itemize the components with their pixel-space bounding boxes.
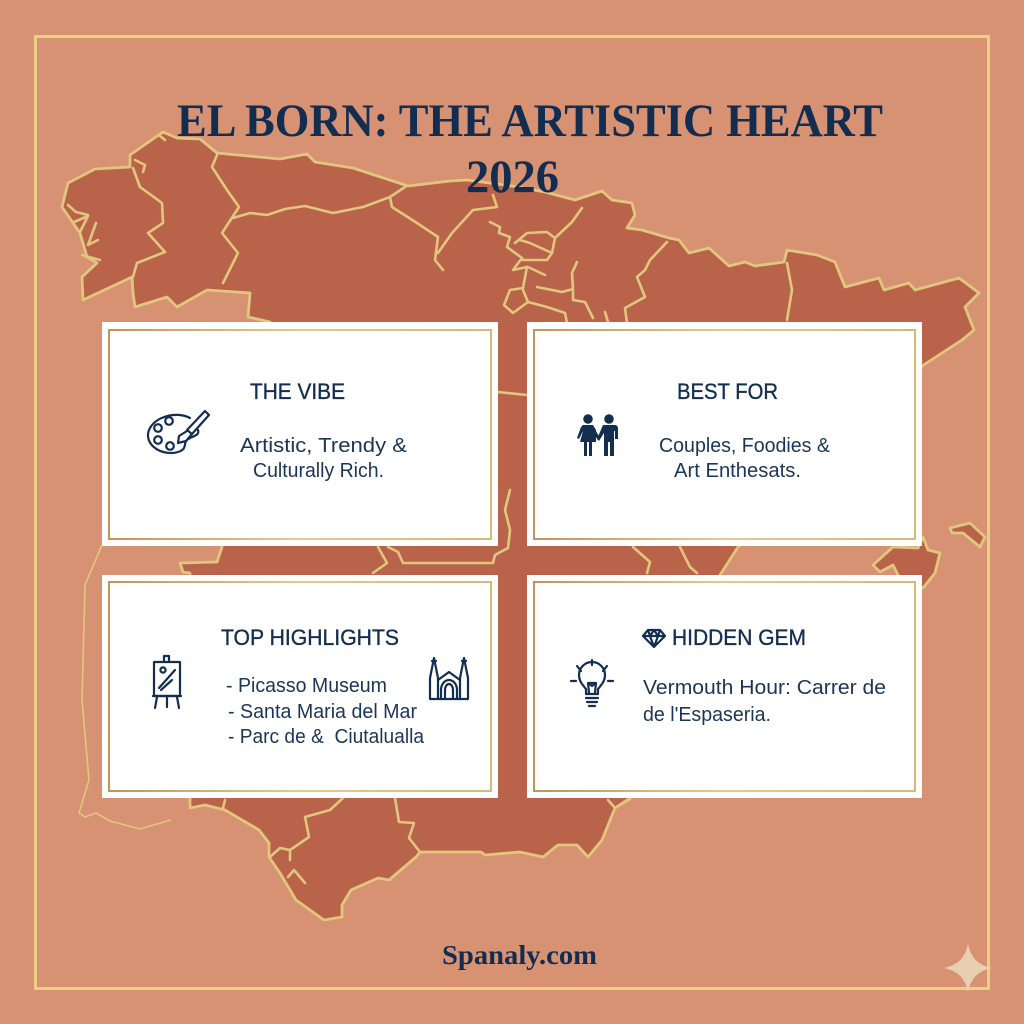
heading: hidden gem: HIDDEN GEM (672, 625, 806, 650)
heading: top highlights: TOP HIGHLIGHTS (221, 625, 399, 650)
map: mainland fill (62, 132, 979, 920)
panel: best for: Art Enthesats. (674, 460, 801, 482)
map of Spain (62, 132, 985, 920)
title: 2026 (466, 151, 559, 203)
heading: the vibe: THE VIBE (250, 379, 345, 404)
map: island (950, 523, 985, 547)
panel: hidden gem (527, 575, 922, 798)
text: best for: Couples, Foodies & (659, 435, 831, 457)
panel: best for (527, 322, 922, 546)
map: region borders (68, 136, 792, 883)
icon: paint palette (148, 411, 209, 453)
heading: best for: BEST FOR (677, 379, 778, 404)
icon: couple (577, 414, 618, 456)
panel: the vibe (102, 322, 498, 546)
map: Portugal faint outline (79, 293, 270, 829)
icon: light bulb (571, 660, 613, 706)
title (177, 95, 883, 203)
icon: easel (153, 656, 181, 708)
title: EL BORN: THE ARTISTIC HEART (177, 95, 883, 147)
list: highlights: - Parc de & Ciutalualla (228, 726, 425, 748)
text: hidden gem: Vermouth Hour: Carrer de (643, 677, 886, 699)
list: highlights: - Picasso Museum (226, 675, 387, 697)
map: eastern coast fill (873, 537, 940, 588)
icon: gem (643, 630, 665, 647)
icon: cathedral arch (430, 658, 468, 699)
panel: the vibe: Culturally Rich. (253, 460, 384, 482)
list: highlights: - Santa Maria del Mar (228, 701, 417, 723)
list: highlights (226, 675, 425, 748)
footer brand: Spanaly.com (442, 940, 598, 970)
panel: hidden gem: de l'Espaseria. (643, 704, 771, 726)
text: the vibe: Artistic, Trendy & (240, 435, 408, 457)
panel: top highlights (102, 575, 498, 798)
icon: sparkle (944, 944, 992, 992)
